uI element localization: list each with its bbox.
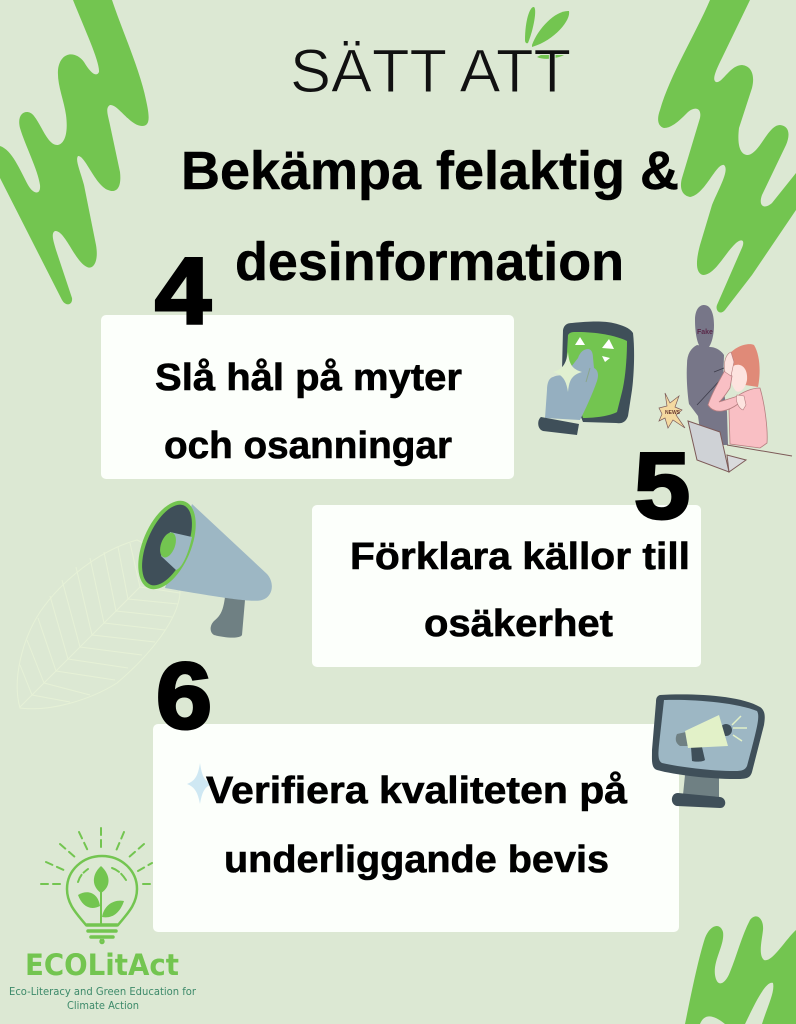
- heading: Bekämpa felaktig & desinformation: Bekämpa felaktig &: [181, 141, 679, 201]
- logo: ECOLitAct: [9, 828, 197, 1012]
- text: card 6: underliggande bevis: [224, 839, 609, 881]
- decoration: sprout leaves behind title: [525, 7, 569, 59]
- text: card 5: Förklara källor till: [350, 536, 690, 578]
- text: card 4: [155, 357, 462, 467]
- text: card 6: [206, 770, 628, 881]
- tagline: Climate Action: [67, 1000, 139, 1012]
- decoration: green blob top left: [0, 0, 149, 304]
- panel: card 4: [101, 315, 514, 479]
- illustration: hooded figure, woman and laptop: [659, 305, 792, 472]
- tagline: [9, 986, 197, 1012]
- text: card 4: Slå hål på myter: [155, 357, 462, 399]
- decoration: pale leaf: [17, 540, 180, 709]
- icon: monitor with megaphone: [652, 694, 765, 808]
- icon: megaphone: [127, 492, 272, 638]
- icon: tablet with tapping hand: [538, 322, 634, 435]
- illustration: hooded figure, woman and laptop: NEWS: [665, 410, 681, 416]
- icon: sparkle: [187, 763, 212, 804]
- number 6: 6: [156, 643, 212, 748]
- text: card 6: Verifiera kvaliteten på: [206, 770, 628, 812]
- burst: [659, 393, 685, 428]
- title: SÄTT ATT: SÄTT ATT: [290, 37, 571, 105]
- number 5: 5: [634, 433, 690, 538]
- tagline: Eco-Literacy and Green Education for: [9, 986, 197, 998]
- villain: [687, 305, 728, 445]
- decoration: green blob bottom right: [685, 916, 796, 1024]
- heading: Bekämpa felaktig & desinformation: [181, 141, 679, 292]
- wordmark: ECOLitAct: [25, 948, 179, 982]
- woman: [727, 344, 760, 387]
- text: card 5: osäkerhet: [424, 603, 613, 645]
- panel: card 6: [153, 724, 679, 932]
- icon: light bulb with plant: [41, 828, 152, 943]
- panel: card 5: [312, 505, 701, 667]
- text: card 5: [350, 536, 690, 645]
- heading: Bekämpa felaktig & desinformation: desinformation: [235, 232, 624, 292]
- text: card 4: och osanningar: [164, 425, 452, 467]
- illustration: hooded figure, woman and laptop: Fake: [697, 329, 713, 336]
- laptop: [688, 421, 729, 472]
- number 4: 4: [155, 238, 211, 343]
- decoration: green blob top right: [658, 0, 796, 313]
